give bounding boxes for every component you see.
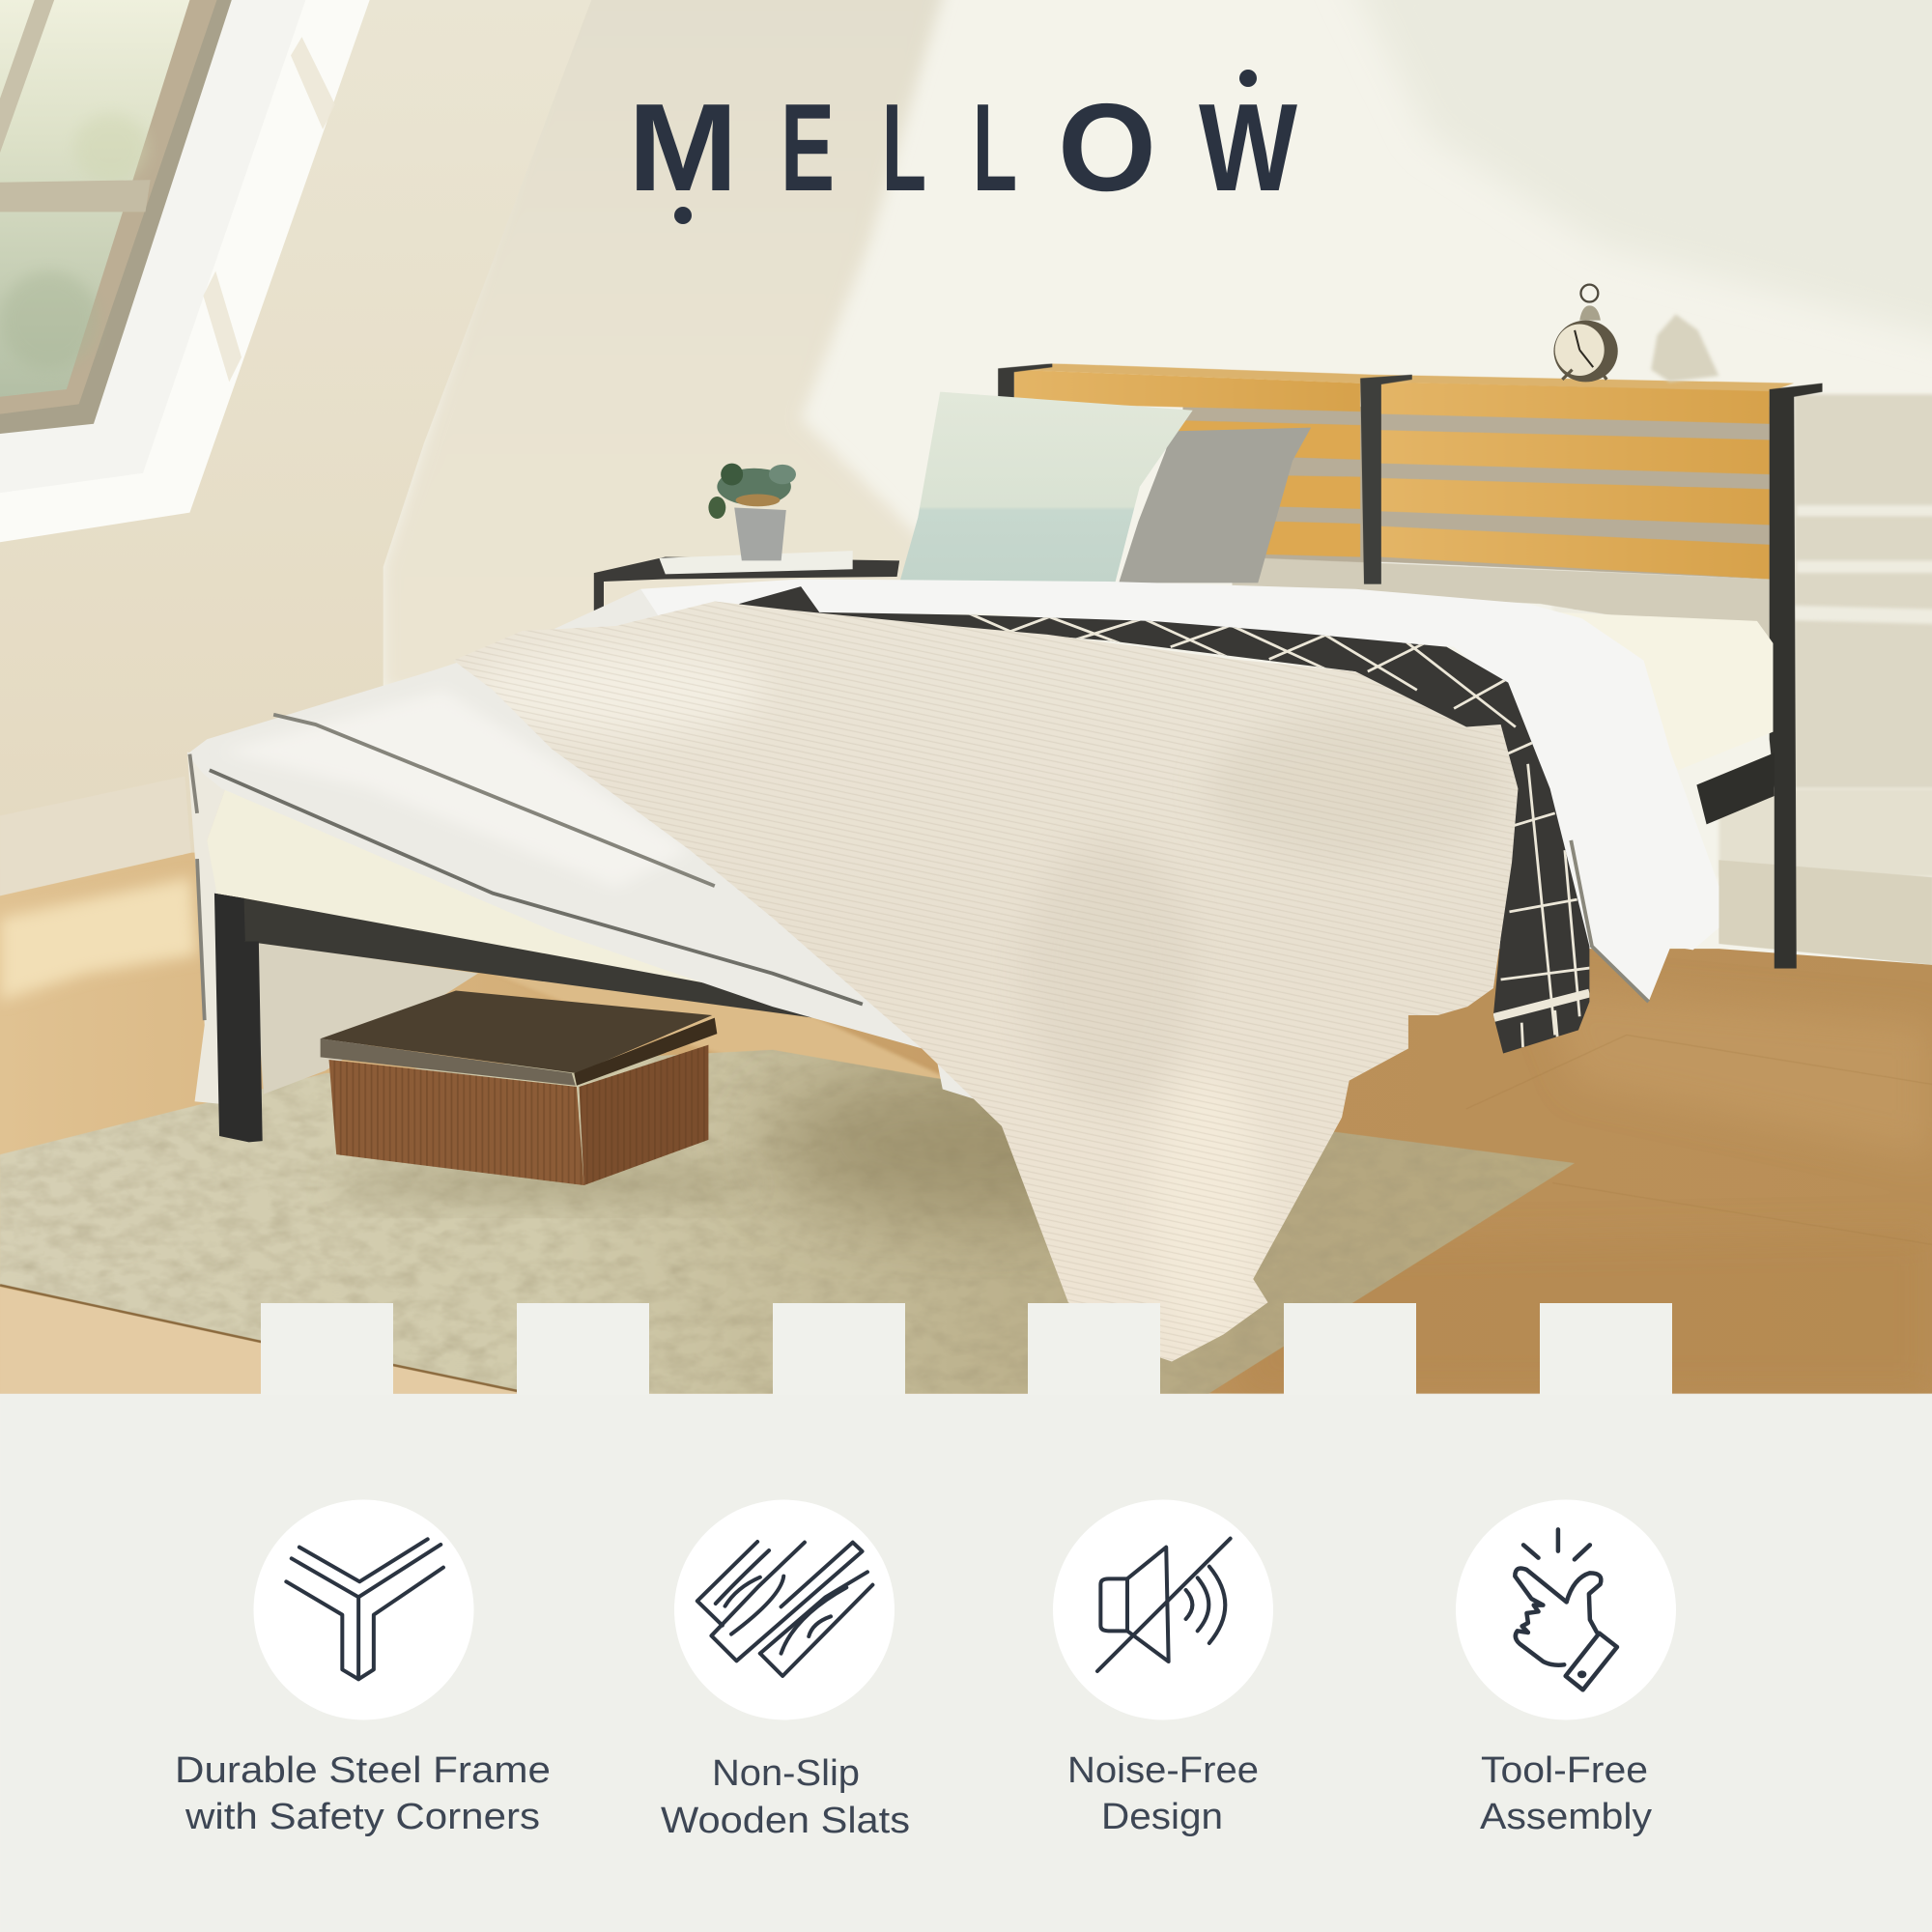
floor: [0, 850, 1932, 1394]
caption: Design: [1101, 1797, 1223, 1837]
nightstand plant leaves: [708, 464, 796, 519]
box lid front: [321, 1038, 576, 1086]
box lid side: [574, 1018, 717, 1086]
floor under bed light: [478, 967, 961, 1084]
caption: with Safety Corners: [185, 1797, 540, 1837]
headboard shadow below slats: [1233, 557, 1770, 640]
headboard slats right: [1380, 382, 1770, 579]
logo wordmark: E: [781, 78, 835, 217]
icon: muted speaker: [1097, 1539, 1231, 1671]
cream knit throw: [453, 601, 1518, 1361]
bedding stripes: [189, 715, 863, 1020]
duvet top and right: [616, 579, 1719, 1002]
dark checked throw: [739, 586, 1589, 1054]
scalloped tabs: [261, 1303, 1672, 1395]
right side rail: [1696, 753, 1775, 824]
caption: [1067, 1750, 1259, 1837]
logo wordmark: W: [1199, 78, 1297, 217]
wall: shadow right of headboard: [1794, 394, 1932, 788]
box front weave: [329, 1060, 584, 1185]
box front: [329, 1060, 584, 1185]
rug bed shadow: [332, 1072, 1182, 1220]
icon: steel corner: [286, 1539, 443, 1679]
sunlit floor patch: [0, 877, 197, 1001]
icon circle: [1053, 1499, 1273, 1719]
left hanging duvet strip: [187, 752, 227, 1104]
logo wordmark: L: [973, 78, 1017, 217]
bed frame leg: [214, 894, 263, 1142]
headboard right post and leg: [1770, 384, 1822, 969]
window inner frame: [0, 0, 216, 414]
duvet grey edge: [1571, 840, 1649, 1002]
mattress left side: [207, 784, 788, 1001]
foliage blotches: [0, 113, 148, 370]
logo wordmark: M: [628, 78, 738, 217]
caption: Assembly: [1480, 1797, 1652, 1837]
clock feet: [1562, 370, 1606, 380]
rug mottled texture: [0, 1052, 978, 1393]
window muntin diagonal: [0, 0, 54, 153]
logo wordmark: O: [1058, 78, 1156, 217]
clock bell: [1579, 305, 1601, 321]
headboard gap shadows: [1182, 407, 1770, 579]
clock shadow on wall: [1651, 314, 1719, 382]
caption: Tool-Free: [1481, 1750, 1648, 1791]
icon circle: [1456, 1499, 1676, 1719]
window light patch: [0, 0, 370, 542]
window muntin shadows on reveal: [203, 37, 335, 382]
wall: light stripes: [1552, 505, 1932, 624]
icon circle: [253, 1499, 473, 1719]
floor plank tones: [1233, 985, 1932, 1394]
window muntin horizontal: [0, 180, 151, 212]
logo wordmark: L: [882, 78, 926, 217]
bottom panel: [0, 1394, 1932, 1932]
storage box: [321, 991, 717, 1185]
window white reveal: [0, 0, 305, 493]
clock face: [1555, 324, 1605, 376]
caption: [661, 1753, 910, 1841]
feature: non-slip wooden slats: [661, 1499, 910, 1841]
caption: Non-Slip: [712, 1753, 860, 1794]
bedding highlight: [222, 690, 690, 887]
nightstand top: [594, 557, 899, 623]
lower left pale floor: [0, 1288, 529, 1394]
box side: [579, 1045, 708, 1185]
throw shading and knit texture: [431, 591, 1540, 1380]
checked throw grid lines: [961, 604, 1596, 1047]
icon: snapping hand: [1515, 1529, 1617, 1690]
headboard top bar left: [1014, 370, 1360, 412]
floor plank seams: [1466, 1035, 1932, 1244]
feature: noise-free design: [1053, 1499, 1273, 1837]
icon: wooden planks: [697, 1542, 872, 1676]
grey pillow: [1119, 428, 1311, 582]
nightstand: [594, 464, 899, 623]
wall: lower right: [1719, 788, 1932, 877]
nightstand book: [659, 551, 853, 574]
caption: Noise-Free: [1067, 1750, 1259, 1791]
hanging sheet behind leg: [252, 941, 478, 1094]
caption: Durable Steel Frame: [175, 1750, 551, 1791]
baseboard right: [1719, 860, 1932, 965]
icon circle: [674, 1499, 895, 1719]
logo dot upper: [1239, 70, 1257, 87]
window glass with foliage: [0, 0, 189, 397]
caption: [175, 1750, 551, 1837]
wall: right section light tone: [384, 0, 949, 690]
mint pillow: [899, 392, 1193, 582]
mattress right end: [1557, 612, 1773, 770]
alarm clock: [1553, 285, 1719, 382]
wall background: [0, 0, 1932, 1010]
rug edge: [0, 1285, 529, 1394]
sloped ceiling wall: [0, 0, 591, 1010]
logo dot lower: [674, 207, 692, 224]
window frame: [0, 0, 232, 434]
baseboard left: [0, 777, 191, 895]
headboard left cap: [998, 363, 1052, 403]
clock hands: [1575, 330, 1593, 367]
headboard centre post: [1360, 375, 1412, 584]
white bedding left: [187, 589, 1002, 1108]
bed frame rail: [214, 894, 813, 1018]
box side weave: [579, 1045, 708, 1185]
logo: MELLOW: [628, 70, 1297, 224]
headboard slats left: [1171, 420, 1360, 557]
feature: tool-free assembly: [1456, 1499, 1676, 1837]
caption: Wooden Slats: [661, 1801, 910, 1841]
wall: upper right soft shade: [1343, 0, 1932, 345]
box lid top: [321, 991, 712, 1073]
caption: [1480, 1750, 1652, 1837]
clock body: [1553, 321, 1618, 382]
headboard top surface: [1014, 363, 1794, 392]
feature: durable steel frame: [175, 1499, 551, 1837]
nightstand plant pot: [734, 508, 786, 560]
clock ring: [1580, 285, 1598, 301]
rug: [0, 1050, 1575, 1394]
